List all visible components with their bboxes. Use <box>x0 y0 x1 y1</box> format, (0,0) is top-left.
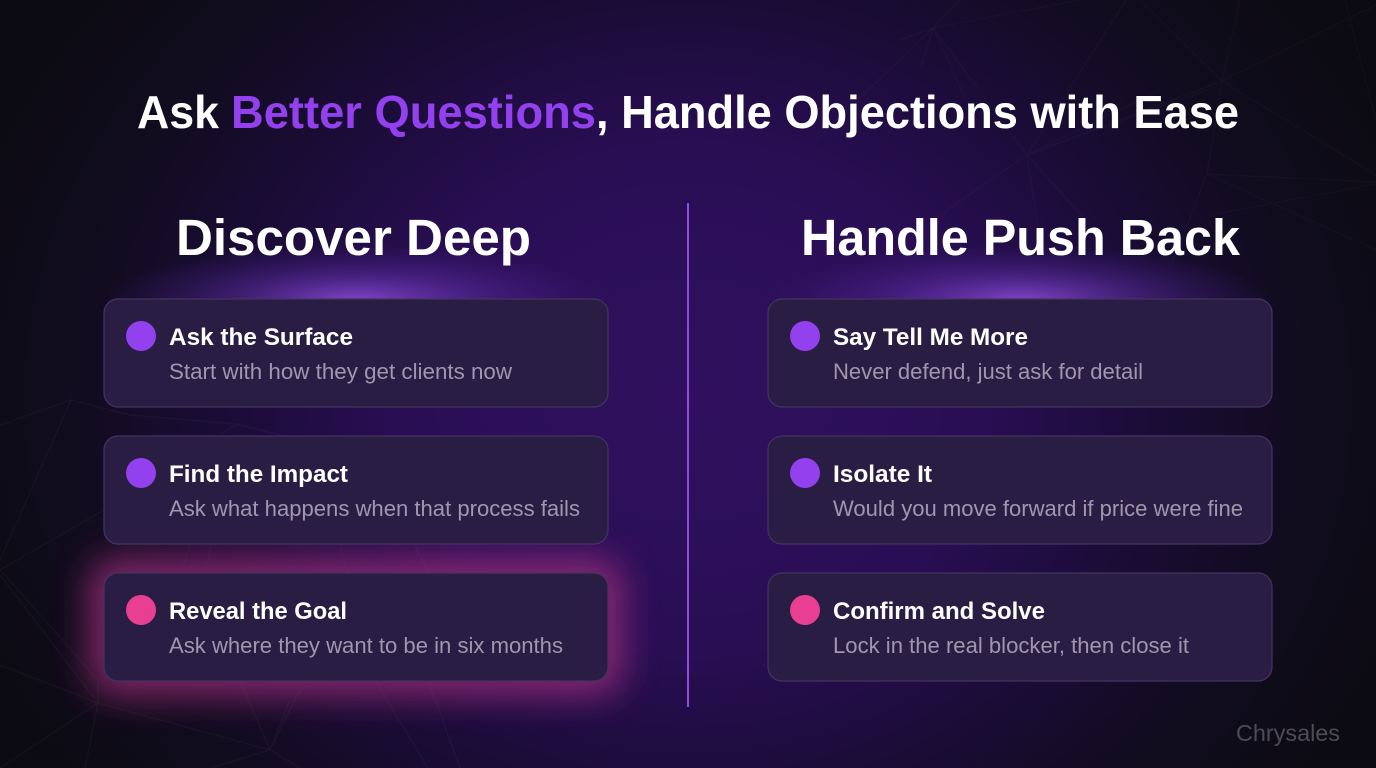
card: Confirm and Solve <box>768 573 1272 681</box>
icon: purple dot <box>126 321 156 351</box>
icon: purple dot <box>790 321 820 351</box>
panel: Discover Deep <box>90 209 622 695</box>
glow above first card <box>768 244 1272 300</box>
watermark: Chrysales: Chrysales <box>1236 720 1340 746</box>
card description: Never defend, just ask for detail <box>833 359 1143 384</box>
card title: Isolate It <box>833 461 932 488</box>
card title: Ask the Surface <box>169 324 353 351</box>
heading: Discover Deep: Discover Deep <box>176 209 531 266</box>
card description: Ask where they want to be in six months <box>169 633 563 658</box>
divider <box>687 203 689 707</box>
card description: Start with how they get clients now <box>169 359 512 384</box>
card title: Confirm and Solve <box>833 598 1045 625</box>
icon: pink dot <box>790 595 820 625</box>
polygon mesh pattern top right <box>816 0 1376 268</box>
card: Find the Impact <box>104 436 608 544</box>
card: Isolate It <box>768 436 1272 544</box>
heading: Handle Push Back: Handle Push Back <box>801 209 1241 266</box>
panel: Handle Push Back <box>768 209 1272 681</box>
card: Reveal the Goal <box>104 573 608 681</box>
card: Say Tell Me More <box>768 299 1272 407</box>
card description: Ask what happens when that process fails <box>169 496 580 521</box>
icon: pink dot <box>126 595 156 625</box>
polygon mesh pattern bottom left <box>0 400 460 768</box>
glow above first card <box>104 244 608 300</box>
card description: Would you move forward if price were fine <box>833 496 1243 521</box>
card: Ask the Surface <box>104 299 608 407</box>
title: , Handle Objections with Ease <box>596 86 1239 138</box>
card title: Find the Impact <box>169 461 348 488</box>
card title: Say Tell Me More <box>833 324 1028 351</box>
pink glow behind third card <box>90 559 622 695</box>
title <box>137 86 1239 138</box>
icon: purple dot <box>126 458 156 488</box>
title: Better Questions <box>231 86 596 138</box>
card description: Lock in the real blocker, then close it <box>833 633 1189 658</box>
icon: purple dot <box>790 458 820 488</box>
card title: Reveal the Goal <box>169 598 347 625</box>
title: Ask <box>137 86 219 138</box>
